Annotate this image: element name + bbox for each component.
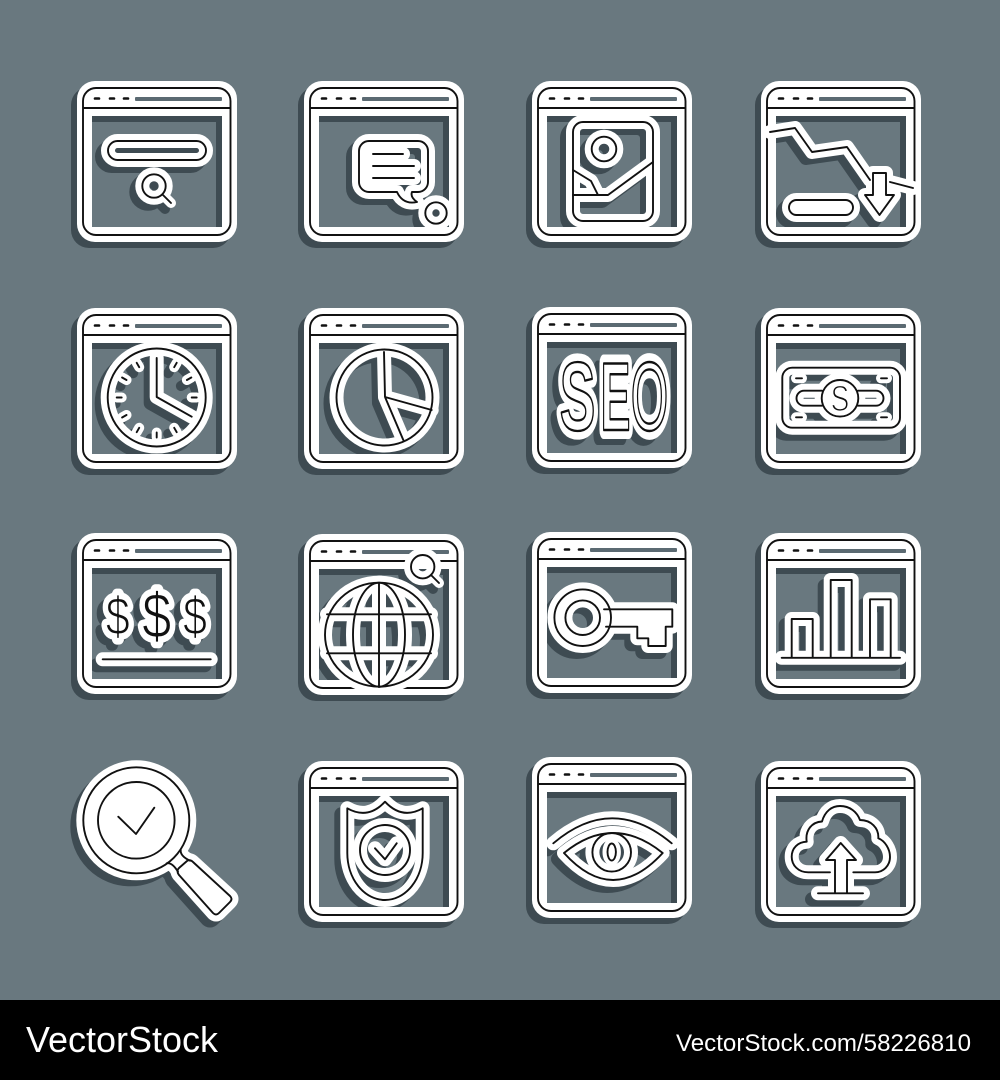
footer bar bbox=[0, 1000, 1000, 1080]
icon: globe search window bbox=[298, 534, 464, 701]
icon: SEO window bbox=[526, 307, 692, 474]
icon: hard drive window bbox=[526, 81, 692, 248]
icon: banknote window bbox=[755, 308, 921, 475]
icon: dollar signs window bbox=[71, 533, 237, 700]
image id: VectorStock.com/58226810 bbox=[676, 1030, 971, 1057]
icon: eye window bbox=[526, 757, 692, 924]
icon: search bar window bbox=[71, 81, 237, 248]
icon: clock window bbox=[71, 308, 237, 475]
icon: magnifier with check mark bbox=[77, 767, 232, 920]
icon: shield window bbox=[298, 761, 464, 928]
icon: speech bubble window bbox=[298, 81, 464, 248]
icon: key window bbox=[526, 532, 692, 699]
icon: pie chart window bbox=[298, 308, 464, 475]
icon: bar chart window bbox=[755, 533, 921, 700]
icon: falling chart window bbox=[755, 81, 921, 248]
icon: cloud upload window bbox=[755, 761, 921, 928]
brand name: VectorStock bbox=[26, 1019, 219, 1060]
